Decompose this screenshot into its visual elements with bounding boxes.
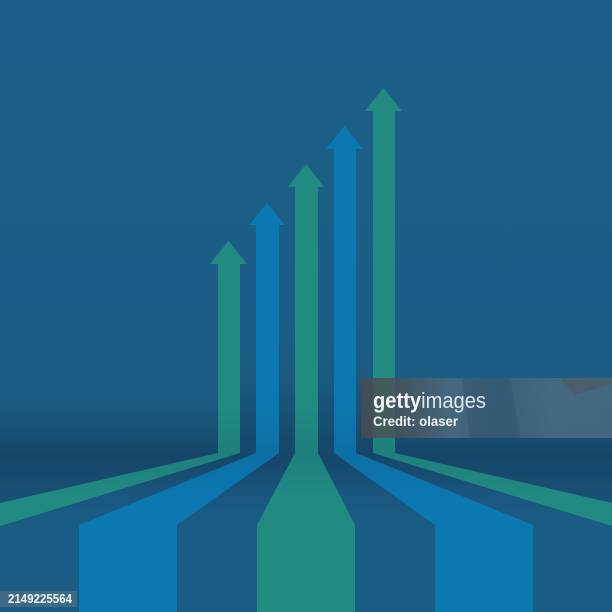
background floor sides [0,453,612,612]
floor band: right green [373,453,612,526]
floor band: center green [257,453,355,612]
dark gaps between arrow shafts [218,300,395,453]
arrow 2: blue [249,203,285,453]
floor band: right blue [334,453,533,612]
watermark credit text: Credit: olaser [373,414,459,429]
floor band: left green [0,453,240,526]
floor band: left blue [79,453,279,612]
watermark panel [361,378,612,438]
watermark logo text: gettyimages [373,388,486,413]
image id label: 2149225564 [8,591,73,606]
arrow 1: green [210,241,247,453]
horizon shading [0,405,612,500]
arrow 3: green [288,164,324,453]
floor fan between the bands [0,453,612,612]
arrow 5: green [365,88,402,453]
background wall [0,0,612,453]
arrow 4: blue [326,126,363,453]
